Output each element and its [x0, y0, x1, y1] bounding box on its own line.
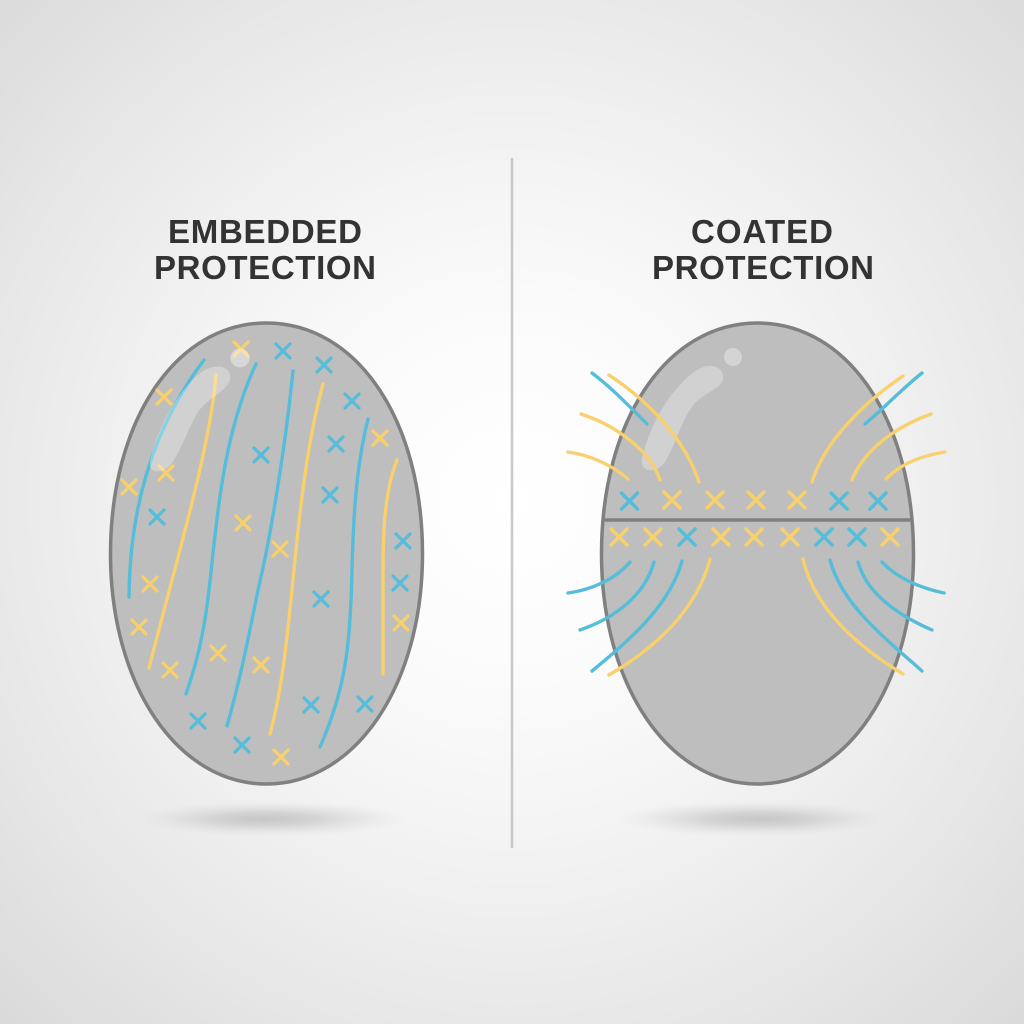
lower cross row [611, 529, 898, 545]
heading: embedded protection [154, 213, 376, 286]
heading: coated protection: COATED [691, 213, 833, 250]
ground shadow: right [612, 800, 908, 838]
egg body right [602, 323, 914, 784]
heading: embedded protection: EMBEDDED [168, 213, 362, 250]
egg body left [110, 323, 422, 784]
upper left strands [568, 373, 699, 482]
upper right strands [812, 373, 945, 482]
ground shadow: left [116, 800, 412, 838]
embedded fibres [129, 360, 397, 747]
embedded crosses [122, 342, 410, 764]
panel: coated egg [568, 323, 945, 784]
lower right strands [803, 559, 944, 674]
gloss highlight [150, 367, 230, 471]
coating band line [602, 518, 913, 522]
gloss highlight right [642, 366, 723, 470]
heading: embedded protection: PROTECTION [154, 249, 376, 286]
lower left strands [568, 559, 710, 675]
upper cross row [622, 492, 886, 509]
panel: embedded egg [110, 323, 422, 784]
gloss dot right [724, 348, 742, 366]
center divider [511, 158, 513, 848]
heading: coated protection: PROTECTION [652, 249, 874, 286]
heading: coated protection [652, 213, 874, 286]
gloss dot [230, 348, 250, 368]
